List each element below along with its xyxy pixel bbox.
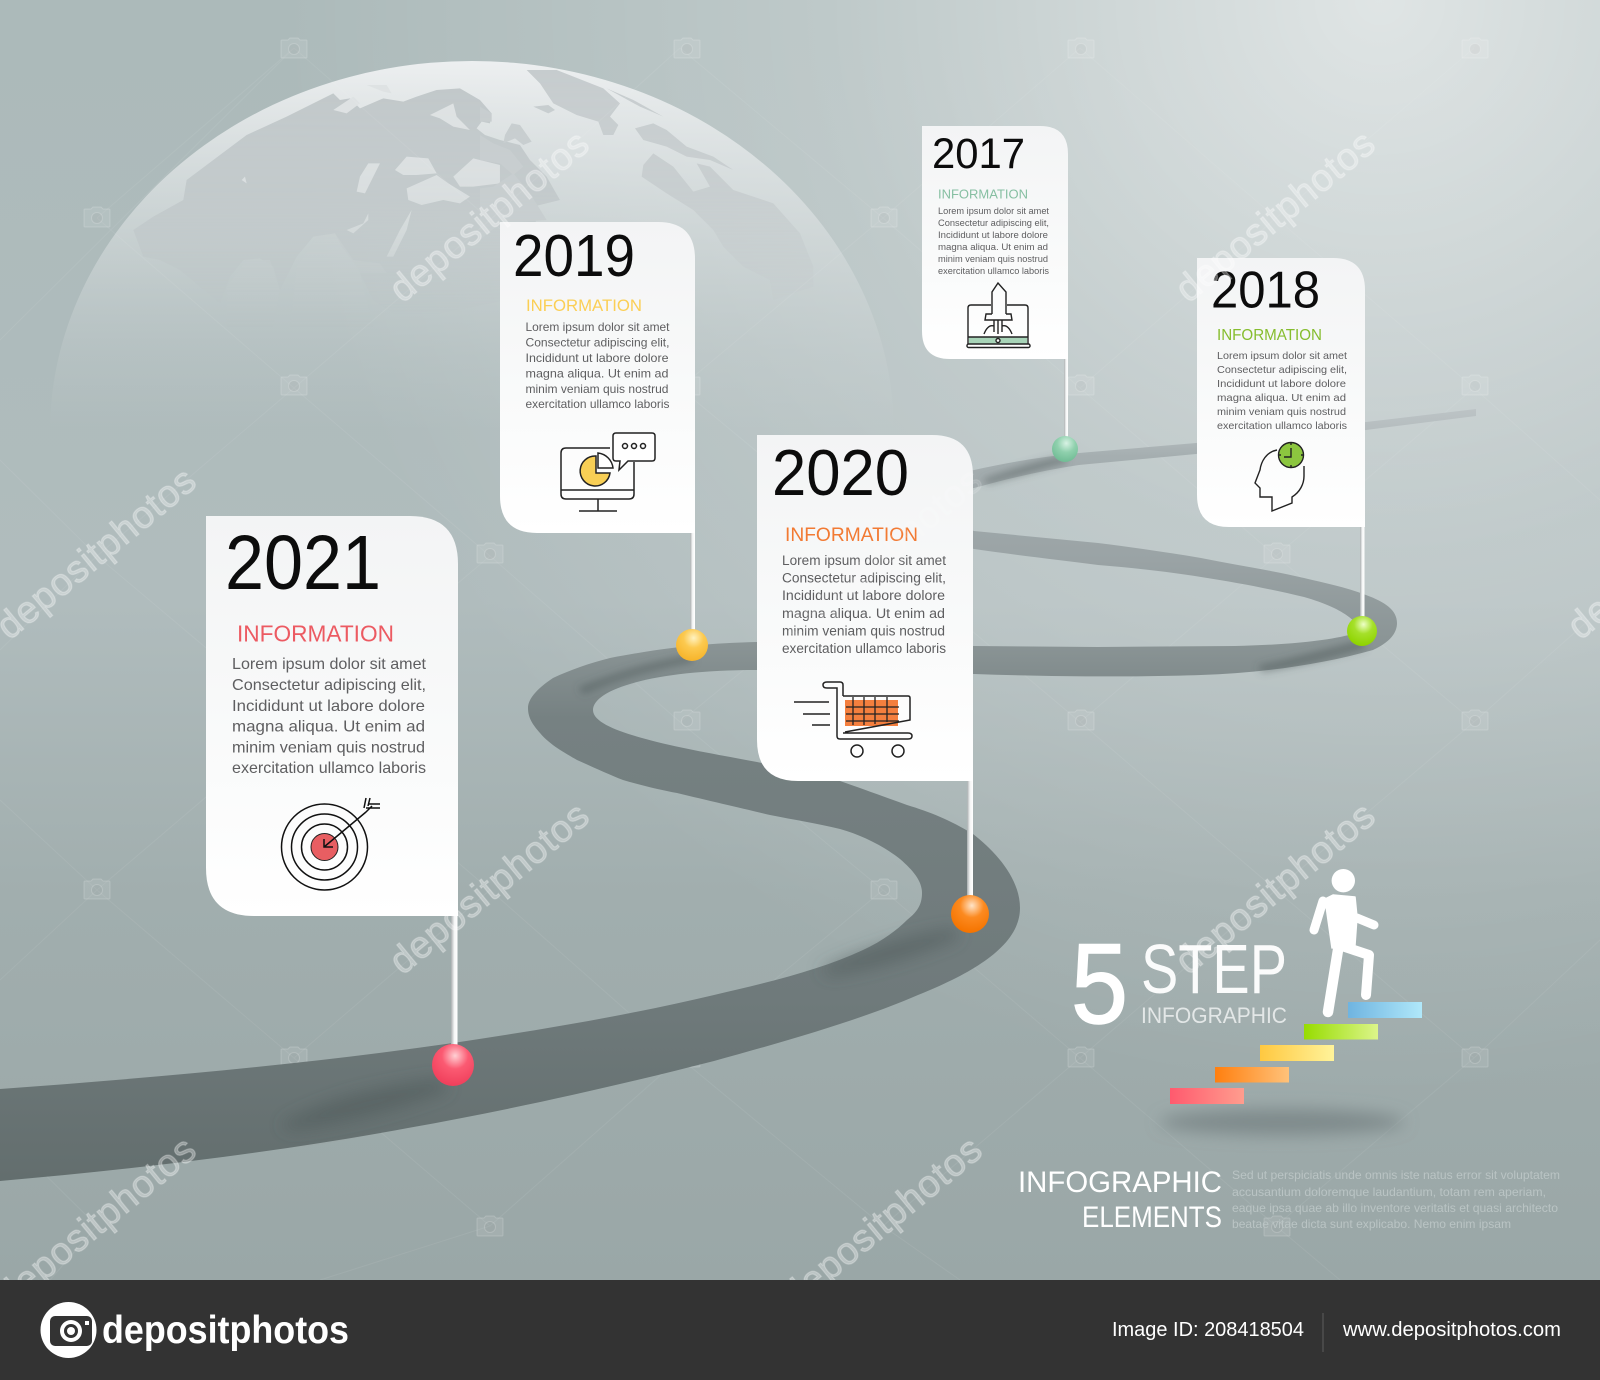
word INFOGRAPHIC: INFOGRAPHIC xyxy=(1141,1003,1287,1028)
body text 2018: exercitation ullamco laboris xyxy=(1217,421,1347,432)
icon: depositphotos camera logo xyxy=(40,1302,96,1358)
card 2017 flag xyxy=(922,126,1078,462)
image id: Image ID: 208418504 xyxy=(1112,1319,1304,1341)
card panel 2017 xyxy=(922,126,1068,359)
body text 2017: Consectetur adipiscing elit, xyxy=(938,218,1049,228)
description text xyxy=(1232,1168,1560,1231)
title: infographic elements xyxy=(1018,1166,1222,1234)
body text 2020: Consectetur adipiscing elit, xyxy=(782,570,946,586)
footer bar xyxy=(0,1280,1600,1380)
year 2017: 2017 xyxy=(932,130,1025,178)
body text 2021: Incididunt ut labore dolore xyxy=(232,698,425,715)
year 2021: 2021 xyxy=(225,520,381,606)
description text: eaque ipsa quae ab illo inventore veritatis et quasi architecto xyxy=(1232,1201,1558,1215)
body text 2021: exercitation ullamco laboris xyxy=(232,760,426,777)
heading 2017: INFORMATION xyxy=(938,186,1028,202)
title: infographic elements: ELEMENTS xyxy=(1082,1201,1222,1234)
marker ball 2021 xyxy=(432,1044,474,1086)
website url: www.depositphotos.com xyxy=(1342,1319,1561,1341)
body text 2021 xyxy=(232,656,427,777)
description text: Sed ut perspiciatis unde omnis iste natus error sit voluptatem xyxy=(1232,1168,1560,1182)
diagonal watermarks: depositphotos xyxy=(381,123,597,311)
body text 2017: Incididunt ut labore dolore xyxy=(938,230,1048,240)
body text 2019: exercitation ullamco laboris xyxy=(526,397,670,411)
body text 2020: Lorem ipsum dolor sit amet xyxy=(782,553,946,568)
marker ball 2019 xyxy=(676,629,708,661)
watermark camera icons xyxy=(84,38,1488,1236)
title: infographic elements: INFOGRAPHIC xyxy=(1018,1166,1222,1199)
heading 2019: INFORMATION xyxy=(526,296,642,315)
heading 2020: INFORMATION xyxy=(785,524,918,546)
stairs shadow xyxy=(1160,1109,1404,1135)
5 step infographic block xyxy=(1071,869,1422,1135)
winding road xyxy=(0,409,1476,1181)
card 2019 flag xyxy=(500,222,708,661)
heading 2021: INFORMATION xyxy=(237,620,394,646)
card 2021 flag xyxy=(206,516,474,1086)
body text 2018: minim veniam quis nostrud xyxy=(1217,407,1346,418)
pole 2017 xyxy=(1064,356,1068,441)
card panel 2020 xyxy=(757,435,973,781)
year 2019: 2019 xyxy=(513,223,635,289)
marker ball 2020 xyxy=(951,895,989,933)
body text 2021: Consectetur adipiscing elit, xyxy=(232,677,426,694)
icon: monitor with pie chart and speech bubble xyxy=(561,433,655,511)
body text 2021: Lorem ipsum dolor sit amet xyxy=(232,656,427,673)
body text 2018: Consectetur adipiscing elit, xyxy=(1217,365,1347,376)
year 2018: 2018 xyxy=(1211,262,1320,320)
body text 2017 xyxy=(938,206,1050,276)
logo wordmark: depositphotos xyxy=(102,1309,349,1352)
body text 2019: Lorem ipsum dolor sit amet xyxy=(526,320,670,334)
card 2020 flag xyxy=(757,435,989,933)
description text: beatae vitae dicta sunt explicabo. Nemo enim ipsam xyxy=(1232,1217,1511,1231)
body text 2017: minim veniam quis nostrud xyxy=(938,254,1048,264)
body text 2018: magna aliqua. Ut enim ad xyxy=(1217,393,1346,404)
body text 2017: Lorem ipsum dolor sit amet xyxy=(938,206,1050,216)
card panel 2021 xyxy=(206,516,458,916)
diagonal watermarks: depositphotos xyxy=(1167,795,1383,983)
body text 2021: minim veniam quis nostrud xyxy=(232,740,425,756)
pole 2018 xyxy=(1360,524,1364,622)
body text 2018 xyxy=(1217,351,1347,432)
body text 2019: Consectetur adipiscing elit, xyxy=(526,336,670,350)
body text 2018: Incididunt ut labore dolore xyxy=(1217,379,1346,390)
body text 2021: magna aliqua. Ut enim ad xyxy=(232,718,425,736)
year 2020: 2020 xyxy=(772,436,909,509)
description text: accusantium doloremque laudantium, totam rem aperiam, xyxy=(1232,1185,1546,1199)
word STEP: STEP xyxy=(1141,930,1287,1008)
marker ball 2017 xyxy=(1052,436,1078,462)
icon: speeding shopping cart xyxy=(794,682,912,757)
diagonal watermarks: depositphotos xyxy=(381,795,597,983)
diagonal watermarks: depositphotos xyxy=(1167,123,1383,311)
icon: person climbing steps xyxy=(1314,869,1374,1012)
card panel 2019 xyxy=(500,222,695,533)
body text 2020 xyxy=(782,553,946,656)
body text 2017: exercitation ullamco laboris xyxy=(938,266,1049,276)
body text 2020: magna aliqua. Ut enim ad xyxy=(782,606,945,621)
icon: rocket launching from laptop xyxy=(967,283,1030,348)
diagonal watermarks: depositphotos xyxy=(774,460,990,648)
card panel 2018 xyxy=(1197,258,1365,527)
big number 5: 5 xyxy=(1071,921,1128,1048)
body text 2019 xyxy=(526,320,670,411)
body text 2020: Incididunt ut labore dolore xyxy=(782,588,945,603)
ball shadows on road xyxy=(280,456,1366,1130)
pole 2021 xyxy=(451,910,458,1050)
body text 2020: exercitation ullamco laboris xyxy=(782,641,946,656)
body text 2019: magna aliqua. Ut enim ad xyxy=(526,366,668,380)
marker ball 2018 xyxy=(1347,616,1377,646)
body text 2019: minim veniam quis nostrud xyxy=(526,382,668,396)
icon: target with arrow xyxy=(282,798,380,890)
pole 2019 xyxy=(690,530,695,635)
icon: head with clock xyxy=(1255,442,1304,511)
globe with continents xyxy=(62,61,870,346)
body text 2020: minim veniam quis nostrud xyxy=(782,624,945,638)
diagonal watermarks: depositphotos xyxy=(774,1129,990,1317)
body text 2017: magna aliqua. Ut enim ad xyxy=(938,242,1048,252)
coloured steps xyxy=(1170,1002,1422,1104)
pole 2020 xyxy=(967,778,973,903)
heading 2018: INFORMATION xyxy=(1217,327,1322,344)
body text 2018: Lorem ipsum dolor sit amet xyxy=(1217,351,1347,362)
card 2018 flag xyxy=(1197,258,1377,646)
body text 2019: Incididunt ut labore dolore xyxy=(526,351,669,365)
